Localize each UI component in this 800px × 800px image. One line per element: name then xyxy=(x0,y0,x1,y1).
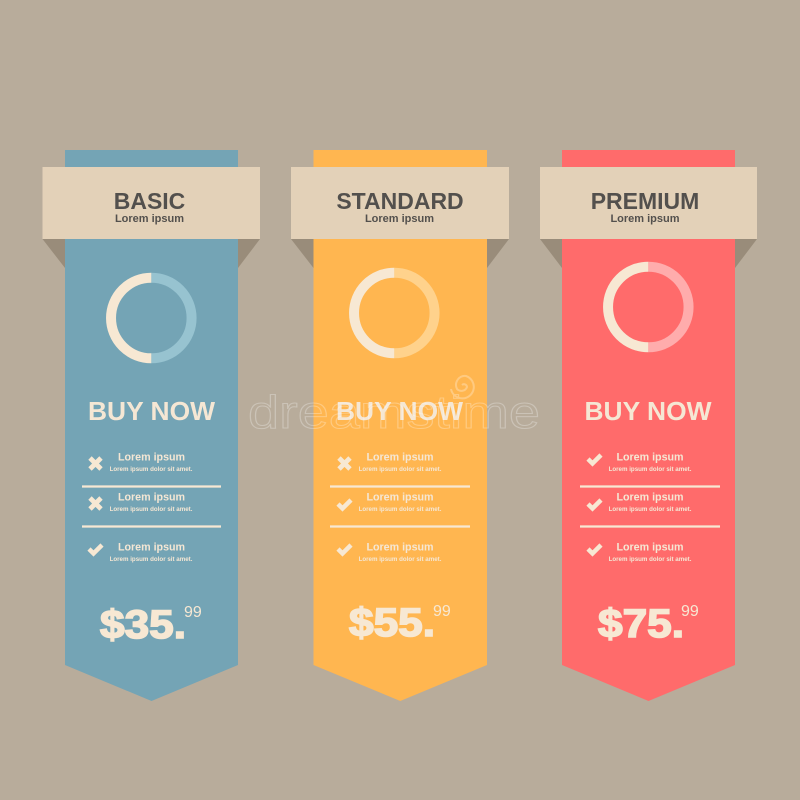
ring chart: premium xyxy=(608,267,689,347)
price: basic: $35. xyxy=(100,603,186,647)
feature 1: standard: Lorem ipsum dolor sit amet. xyxy=(359,466,442,473)
panel: standard plan xyxy=(291,150,509,701)
price: premium: $75. xyxy=(598,602,684,646)
ribbon: basic xyxy=(65,150,238,701)
feature 3: standard: Lorem ipsum dolor sit amet. xyxy=(359,556,442,563)
call to action: premium: BUY NOW xyxy=(584,396,712,426)
panel: basic plan xyxy=(42,150,260,701)
subheading: standard: Lorem ipsum xyxy=(365,213,434,225)
feature 3: basic: Lorem ipsum xyxy=(118,542,185,554)
banner folds: basic xyxy=(42,239,260,268)
cents: premium: 99 xyxy=(681,603,699,620)
subheading: premium: Lorem ipsum xyxy=(610,213,680,225)
feature 3: premium xyxy=(588,542,692,563)
banner: premium xyxy=(540,167,757,239)
feature 2: standard: Lorem ipsum xyxy=(366,492,434,504)
feature 1: basic xyxy=(90,452,193,473)
feature 3: basic xyxy=(89,542,193,563)
feature 1: standard xyxy=(339,452,442,473)
watermark: dreamstime xyxy=(248,386,540,438)
heading: basic: BASIC xyxy=(114,188,185,214)
feature 2: premium: Lorem ipsum xyxy=(616,492,684,504)
call to action: basic: BUY NOW xyxy=(88,396,215,426)
price: standard: $55. xyxy=(349,601,435,645)
ring chart: basic xyxy=(111,278,192,358)
feature 1: premium xyxy=(588,452,692,473)
feature 2: basic: Lorem ipsum dolor sit amet. xyxy=(110,506,193,513)
feature 2: standard: Lorem ipsum dolor sit amet. xyxy=(359,506,442,513)
feature 1: premium: Lorem ipsum xyxy=(616,452,684,464)
banner: standard xyxy=(291,167,509,239)
ring chart: standard xyxy=(354,273,435,353)
panel: premium plan xyxy=(540,150,757,701)
feature 2: premium xyxy=(588,492,692,513)
feature 1: premium: Lorem ipsum dolor sit amet. xyxy=(609,466,692,473)
heading: standard: STANDARD xyxy=(336,188,464,214)
banner folds: premium xyxy=(540,239,757,268)
feature 1: basic: Lorem ipsum dolor sit amet. xyxy=(110,466,193,473)
feature 2: basic: Lorem ipsum xyxy=(118,492,185,504)
heading: premium: PREMIUM xyxy=(591,188,699,214)
cents: basic: 99 xyxy=(184,604,202,621)
feature 1: basic: Lorem ipsum xyxy=(118,452,185,464)
feature 1: standard: Lorem ipsum xyxy=(366,452,434,464)
ribbon: premium xyxy=(562,150,735,701)
banner folds: standard xyxy=(291,239,509,268)
feature 3: premium: Lorem ipsum dolor sit amet. xyxy=(609,556,692,563)
call to action: standard: BUY NOW xyxy=(336,396,463,426)
banner: basic xyxy=(42,167,260,239)
feature 2: premium: Lorem ipsum dolor sit amet. xyxy=(609,506,692,513)
feature 3: premium: Lorem ipsum xyxy=(616,542,684,554)
ribbon: standard xyxy=(314,150,487,701)
subheading: basic: Lorem ipsum xyxy=(115,213,184,225)
feature 3: basic: Lorem ipsum dolor sit amet. xyxy=(110,556,193,563)
cents: standard: 99 xyxy=(433,603,451,620)
watermark xyxy=(248,376,540,438)
feature 2: standard xyxy=(338,492,442,513)
feature 2: basic xyxy=(90,492,193,513)
feature 3: standard xyxy=(338,542,442,563)
feature 3: standard: Lorem ipsum xyxy=(366,542,434,554)
